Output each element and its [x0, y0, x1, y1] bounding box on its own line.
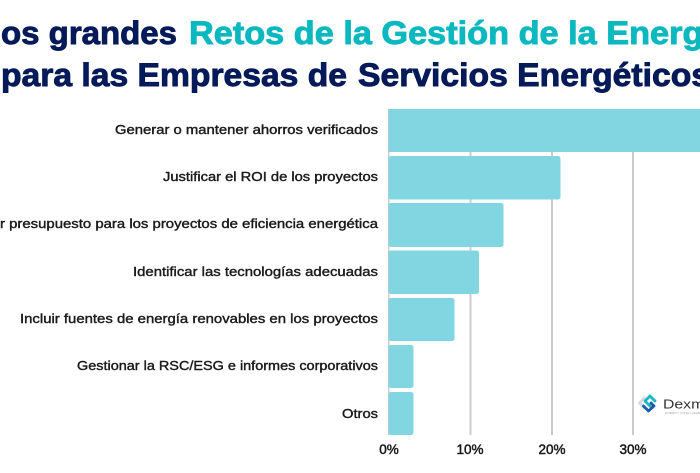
axis labels: 30% — [619, 442, 647, 457]
logo: Dexma — [640, 396, 700, 415]
category labels: Otros — [342, 406, 379, 421]
axis labels: 10% — [456, 442, 484, 457]
bar: renovables — [388, 298, 454, 341]
category labels — [0, 122, 379, 421]
icon: logo mark — [640, 396, 655, 411]
category labels: Identificar las tecnologías adecuadas — [133, 264, 379, 279]
bar chart — [388, 109, 700, 435]
title — [1, 15, 700, 93]
category labels: Justificar el ROI de los proyectos — [163, 169, 379, 184]
bar: presupuesto — [388, 203, 504, 247]
title: os grandes — [1, 15, 177, 51]
bar: Justificar el ROI — [388, 156, 560, 200]
title: Servicios Energéticos — [358, 57, 700, 93]
bar: tecnologías — [388, 250, 479, 294]
bar: Generar o mantener ahorros verificados — [388, 109, 700, 152]
category labels: Generar o mantener ahorros verificados — [115, 122, 379, 137]
category labels: Incluir fuentes de energía renovables en los proyectos — [20, 311, 379, 326]
axis labels — [379, 442, 647, 457]
title: Retos de la Gestión de la Energía — [189, 15, 700, 51]
category labels: r presupuesto para los proyectos de eficiencia energética — [0, 216, 379, 231]
axis labels: 20% — [538, 442, 566, 457]
logo tagline: ENERGY INTELLIGENCE — [665, 411, 700, 415]
title: para las Empresas de — [1, 57, 347, 93]
axis labels: 0% — [379, 442, 399, 457]
category labels: Gestionar la RSC/ESG e informes corporativos — [77, 358, 379, 373]
bar: RSC/ESG — [388, 345, 414, 388]
bar: Otros — [388, 392, 414, 435]
